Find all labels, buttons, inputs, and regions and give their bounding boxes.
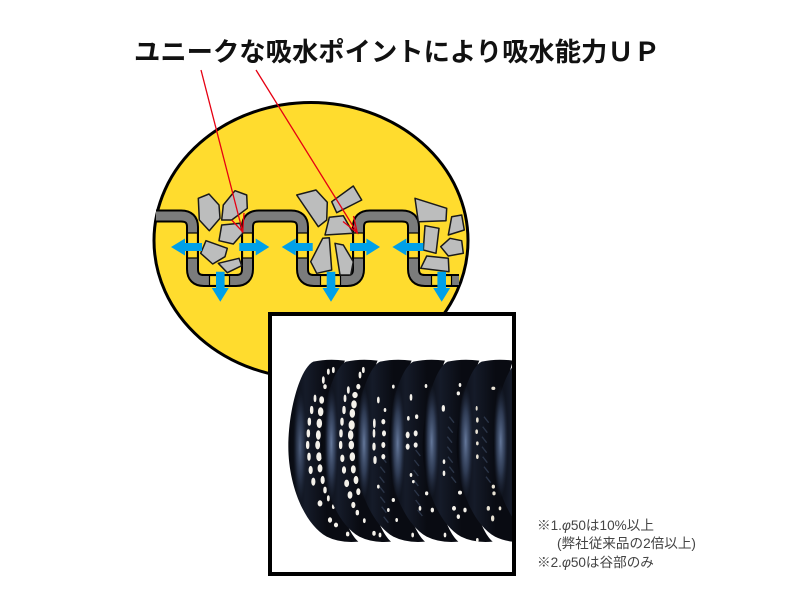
- photo frame: [268, 312, 516, 576]
- red leader arrows: [201, 70, 357, 233]
- rib 2: [321, 360, 391, 542]
- rib 5: [423, 360, 493, 542]
- rib 1: [288, 360, 358, 542]
- blue water-flow arrows: [171, 238, 450, 302]
- rib 6: [459, 360, 512, 542]
- rib 4: [388, 360, 458, 542]
- rib 3: [355, 360, 425, 542]
- panel: yellow magnified circle: [154, 102, 468, 378]
- rocks: right valley: [415, 198, 464, 272]
- title: ユニークな吸水ポイントにより吸水能力ＵＰ: [134, 37, 660, 67]
- rib 7: [494, 368, 512, 516]
- corrugated pipe wall: [156, 216, 459, 286]
- footnotes: ※1.φ50は10%以上: [537, 518, 654, 533]
- photo: perforated black drainage hose: [288, 360, 512, 542]
- rocks: left valley: [198, 191, 247, 273]
- footnotes: (弊社従来品の2倍以上): [557, 536, 696, 551]
- footnotes: ※2.φ50は谷部のみ: [537, 555, 654, 570]
- rocks: middle valley: [297, 186, 362, 275]
- footnotes: [537, 518, 696, 570]
